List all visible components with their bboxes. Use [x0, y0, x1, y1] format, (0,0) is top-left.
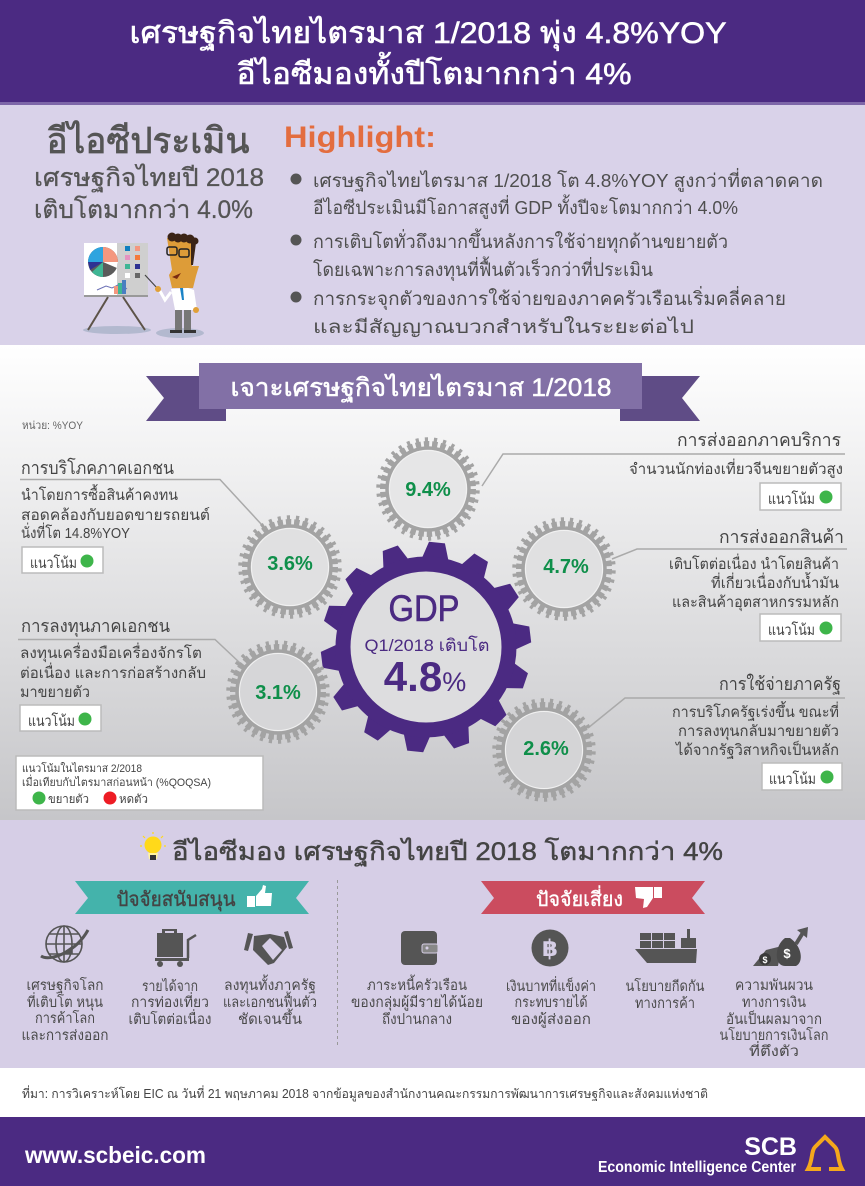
factor: tourism income: เติบโตต่อเนื่อง	[128, 1009, 212, 1028]
factor: trade protectionism: ทางการค้า	[635, 995, 695, 1012]
factor: financial volatility: ความพันผวน	[735, 978, 813, 994]
bullet 2: โดยเฉพาะการลงทุนที่ฟื้นตัวเร็วกว่าที่ประเมิน	[313, 256, 653, 282]
factor: strong baht: ของผู้ส่งออก	[511, 1011, 591, 1028]
SCB wordmark: SCB	[744, 1133, 797, 1161]
gear: exports of goods 4.7%: 4.7%	[543, 556, 589, 578]
gear: private consumption 3.6%	[241, 518, 339, 616]
assessment subheading line 2: เติบโตมากกว่า 4.0%	[34, 195, 253, 224]
trend badge	[20, 705, 101, 731]
bullet 1: เศรษฐกิจไทยไตรมาส 1/2018 โต 4.8%YOY สูงกว่าที่ตลาดคาด	[313, 168, 823, 192]
callout: private consumption: นั่งที่โต 14.8%YOY	[21, 522, 130, 542]
callout: exports of goods: การส่งออกสินค้า	[719, 527, 844, 547]
website: www.scbeic.com	[24, 1142, 206, 1168]
source note: ที่มา: การวิเคราะห์โดย EIC ณ วันที่ 21 พฤษภาคม 2018 จากข้อมูลของสำนักงานคณะกรรมการพัฒนาการเศรษฐกิจและสังคมแห่งชาติ	[22, 1085, 708, 1102]
bullet 3: การกระจุกตัวของการใช้จ่ายของภาคครัวเรือนเริ่มคลี่คลาย	[313, 286, 786, 311]
gear: exports of services 9.4%: 9.4%	[405, 479, 451, 501]
unit note: หน่วย: %YOY	[22, 420, 84, 432]
outlook heading: อีไอซีมอง เศรษฐกิจไทยปี 2018 โตมากกว่า 4%	[172, 837, 723, 866]
callout: exports of goods: ที่เกี่ยวเนื่องกับน้ำมัน	[711, 572, 839, 592]
title line 1: เศรษฐกิจไทยไตรมาส 1/2018 พุ่ง 4.8%YOY	[130, 15, 726, 52]
callout: private consumption: การบริโภคภาคเอกชน	[21, 457, 174, 478]
legend: หดตัว	[119, 792, 148, 806]
factor: household debt: ภาระหนี้ครัวเรือน	[367, 974, 467, 994]
legend	[16, 756, 263, 810]
title banner	[0, 0, 865, 105]
bullet 3: และมีสัญญาณบวกสำหรับในระยะต่อไป	[313, 316, 694, 338]
divider	[336, 880, 338, 1045]
factor: global economy: เศรษฐกิจโลก	[26, 976, 104, 994]
callout: exports of services: จำนวนนักท่องเที่ยวจีนขยายตัวสูง	[629, 458, 843, 478]
icon: luggage cart	[155, 929, 196, 967]
leader lines	[18, 454, 847, 728]
factor: global economy: ที่เติบโต หนุน	[27, 992, 103, 1011]
legend: เมื่อเทียบกับไตรมาสก่อนหน้า (%QOQSA)	[22, 774, 211, 789]
gear: government spending 2.6%	[495, 701, 593, 799]
callout: private consumption: สอดคล้องกับยอดขายรถยนต์	[21, 507, 210, 524]
factor: tourism income	[128, 929, 212, 1028]
icon: baht coin: ฿	[542, 935, 558, 961]
panel: highlight	[284, 121, 823, 338]
trend badge	[760, 483, 841, 510]
factor: strong baht: เงินบาทที่แข็งค่า	[506, 976, 596, 995]
bullet 1: อีไอซีประเมินมีโอกาสสูงที่ GDP ทั้งปีจะโตมากกว่า 4.0%	[313, 194, 738, 219]
legend: ขยายตัว	[48, 792, 89, 806]
footer	[0, 1117, 865, 1186]
trend badge: แนวโน้ม	[769, 770, 816, 788]
factor: strong baht: กระทบรายได้	[514, 993, 588, 1011]
highlight heading: Highlight:	[284, 121, 436, 154]
factor: trade protectionism	[626, 929, 705, 1012]
factor: investment: และเอกชนฟื้นตัว	[223, 991, 317, 1011]
trend badge	[760, 614, 841, 641]
legend: แนวโน้มในไตรมาส 2/2018	[22, 761, 142, 775]
bullet 2: การเติบโตทั่วถึงมากขึ้นหลังการใช้จ่ายทุกด้านขยายตัว	[313, 228, 728, 254]
bullet 1	[290, 168, 823, 219]
factor: financial volatility: นโยบายการเงินโลก	[720, 1026, 828, 1044]
ribbon: risk factors	[481, 881, 705, 914]
callout: private investment	[20, 616, 206, 731]
ribbon: supporting factors: ปัจจัยสนับสนุน	[116, 889, 236, 912]
bullet 2	[290, 228, 728, 282]
trend badge: แนวโน้ม	[30, 554, 77, 572]
callout: exports of goods	[669, 527, 844, 641]
gear: government spending 2.6%: 2.6%	[523, 738, 569, 760]
icon: thumbs up	[247, 885, 272, 907]
organisation name: Economic Intelligence Center	[598, 1159, 796, 1176]
callout: private investment: การลงทุนภาคเอกชน	[21, 616, 170, 637]
factor: investment: ชัดเจนขึ้น	[238, 1008, 302, 1028]
assessment subheading line 1: เศรษฐกิจไทยปี 2018	[34, 163, 264, 192]
trend badge	[762, 763, 842, 790]
gear: exports of services 9.4%	[379, 440, 477, 538]
gear: private consumption 3.6%: 3.6%	[267, 553, 313, 575]
callout: exports of services: การส่งออกภาคบริการ	[677, 430, 841, 450]
trend badge: แนวโน้ม	[768, 490, 815, 508]
callout: private consumption: นำโดยการซื้อสินค้าคงทน	[21, 484, 178, 504]
icon: handshake	[244, 931, 293, 965]
callout: private investment: ต่อเนื่อง และการก่อสร้างกลับ	[20, 662, 206, 682]
trend badge: แนวโน้ม	[768, 621, 815, 639]
icon: money bag with arrow	[753, 927, 808, 966]
GDP value: 4.8%	[384, 653, 466, 700]
callout: government spending: การลงทุนกลับมาขยายตัว	[678, 723, 839, 741]
factor: global economy: การค้าโลก	[35, 1009, 95, 1027]
icon: light bulb	[140, 832, 166, 860]
factor: trade protectionism: นโยบายกีดกัน	[626, 977, 705, 995]
callout: private investment: มาขยายตัว	[20, 684, 90, 701]
icon: SCB logo	[808, 1137, 842, 1169]
panel: EIC assessment	[34, 120, 264, 338]
callout: government spending: การบริโภครัฐเร่งขึ้น ขณะที่	[672, 701, 839, 721]
callout: government spending: ได้จากรัฐวิสาหกิจเป็นหลัก	[675, 740, 839, 759]
icon: money bag with arrow: $	[783, 946, 791, 961]
ribbon: section heading: เจาะเศรษฐกิจไทยไตรมาส 1/2018	[230, 373, 612, 402]
factor: tourism income: การท่องเที่ยว	[131, 992, 209, 1011]
factor: investment: ลงทุนทั้งภาครัฐ	[224, 974, 316, 994]
ribbon: supporting factors	[75, 881, 309, 914]
ribbon: risk factors: ปัจจัยเสี่ยง	[536, 885, 623, 911]
central GDP gear	[320, 541, 532, 753]
trend badge	[22, 547, 103, 573]
factor: strong baht	[506, 930, 596, 1028]
bullet 3	[290, 286, 786, 338]
callout: exports of services	[629, 430, 843, 510]
GDP label: GDP	[388, 588, 460, 629]
ribbon: section heading	[146, 363, 700, 421]
callout: government spending: การใช้จ่ายภาครัฐ	[719, 673, 841, 695]
factor: global economy	[22, 926, 108, 1044]
assessment heading: อีไอซีประเมิน	[46, 120, 250, 161]
factor: financial volatility: ทางการเงิน	[742, 995, 806, 1011]
icon: cargo ship	[635, 929, 697, 963]
icon: wallet	[401, 931, 438, 965]
GDP period label: Q1/2018 เติบโต	[364, 635, 490, 655]
gear: private investment 3.1%: 3.1%	[255, 682, 301, 704]
callout: private consumption	[21, 457, 210, 573]
callout: exports of goods: เติบโตต่อเนื่อง นำโดยสินค้า	[669, 553, 839, 573]
factor: household debt: ถึงปานกลาง	[382, 1012, 452, 1028]
factor: investment	[223, 931, 317, 1028]
factor: global economy: และการส่งออก	[22, 1028, 108, 1044]
icon: globe	[41, 926, 88, 962]
factor: household debt: ของกลุ่มผู้มีรายได้น้อย	[351, 993, 483, 1011]
gear: private investment 3.1%	[229, 643, 327, 741]
illustration: presenter with chart board	[83, 232, 204, 338]
icon: money bag with arrow: $	[762, 955, 768, 965]
trend badge: แนวโน้ม	[28, 712, 75, 730]
icon: thumbs down	[635, 887, 662, 908]
factor: household debt	[351, 931, 483, 1028]
callout: private investment: ลงทุนเครื่องมือเครื่องจักรโต	[20, 642, 202, 663]
callout: government spending	[672, 673, 842, 790]
callout: exports of goods: และสินค้าอุตสาหกรรมหลัก	[672, 594, 839, 612]
factor: financial volatility	[720, 927, 828, 1060]
factor: tourism income: รายได้จาก	[142, 977, 198, 995]
gear: exports of goods 4.7%	[515, 520, 613, 618]
factor: financial volatility: อันเป็นผลมาจาก	[726, 1009, 822, 1028]
factor: financial volatility: ที่ตึงตัว	[749, 1041, 799, 1060]
title line 2: อีไอซีมองทั้งปีโตมากกว่า 4%	[236, 52, 632, 91]
